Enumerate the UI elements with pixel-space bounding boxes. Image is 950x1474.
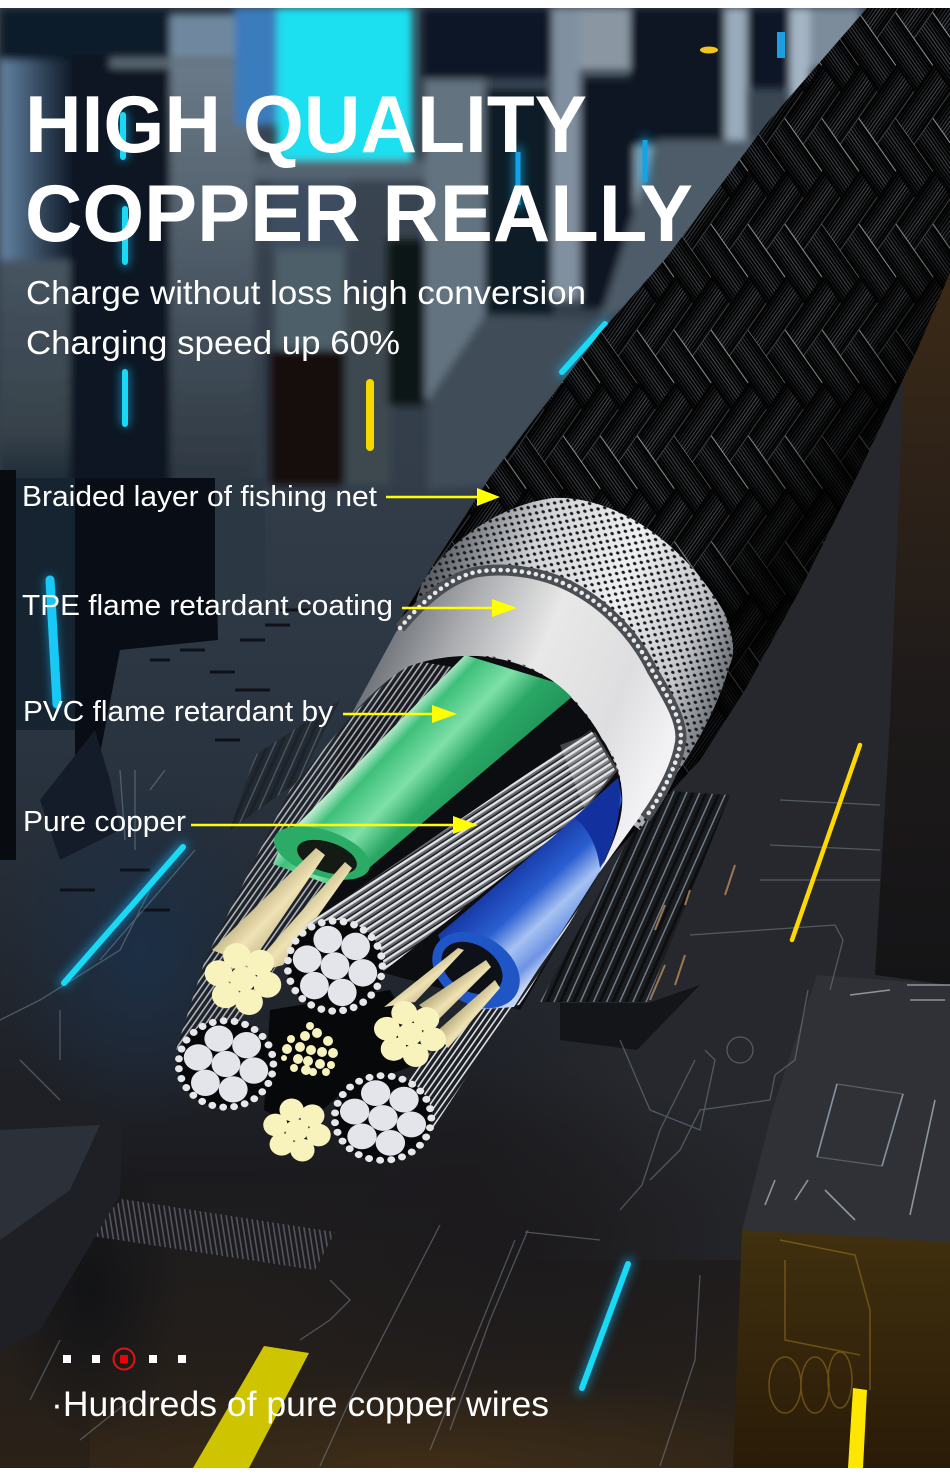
background: blurred towers	[0, 8, 860, 490]
label: pure copper	[25, 811, 478, 837]
silver tape band	[350, 570, 681, 873]
copper rods in green wire	[212, 848, 352, 975]
label: braided layer: Braided layer of fishing net	[22, 481, 377, 513]
background: platform bright details	[765, 985, 950, 1220]
bare silver strand bundle	[304, 730, 618, 971]
label: TPE coating: TPE flame retardant coating	[22, 590, 393, 622]
caption: ·Hundreds of pure copper wires	[51, 1385, 549, 1424]
label: braided layer	[24, 485, 500, 512]
background: striped floor pads	[0, 700, 730, 1350]
label: PVC	[25, 700, 457, 727]
title: HIGH QUALITY	[25, 80, 587, 170]
blue insulated wire	[384, 778, 622, 1048]
copper cluster bottom	[263, 1098, 331, 1162]
copper cluster top left	[205, 943, 281, 1015]
outer silver fan of shield wires	[176, 660, 605, 1130]
silver bundle end top	[287, 920, 383, 1012]
perforated metal shield	[400, 498, 733, 830]
label: TPE coating	[22, 594, 517, 621]
background: circuit traces	[0, 770, 903, 1466]
inner opening shadow	[300, 656, 622, 1010]
subtitle	[26, 274, 586, 361]
copper cluster small centre	[281, 1022, 338, 1076]
silver bundle end left	[178, 1020, 274, 1108]
copper rods in blue wire	[384, 948, 500, 1048]
background: dash marks on floor	[60, 610, 310, 910]
subtitle: Charge without loss high conversion	[26, 274, 586, 311]
pagination dots	[63, 1348, 186, 1370]
background: lower-left dark towers	[0, 470, 218, 860]
green insulated wire	[212, 655, 580, 975]
background: right brown tower	[875, 260, 950, 985]
silver bundle end bottom	[334, 1075, 432, 1161]
background: copper traces	[650, 865, 735, 1000]
title: COPPER REALLY	[25, 169, 693, 259]
background: circuit platform	[742, 975, 950, 1242]
cable outer braid	[400, 8, 950, 880]
cut wire ends	[178, 920, 446, 1162]
copper cluster right	[374, 1001, 446, 1067]
label: pure copper: Pure copper	[23, 806, 186, 838]
background: golden block	[733, 1230, 950, 1468]
title	[28, 96, 692, 242]
label: PVC: PVC flame retardant by	[23, 696, 334, 728]
subtitle: Charging speed up 60%	[26, 324, 400, 361]
background: golden block circles	[769, 1240, 870, 1413]
